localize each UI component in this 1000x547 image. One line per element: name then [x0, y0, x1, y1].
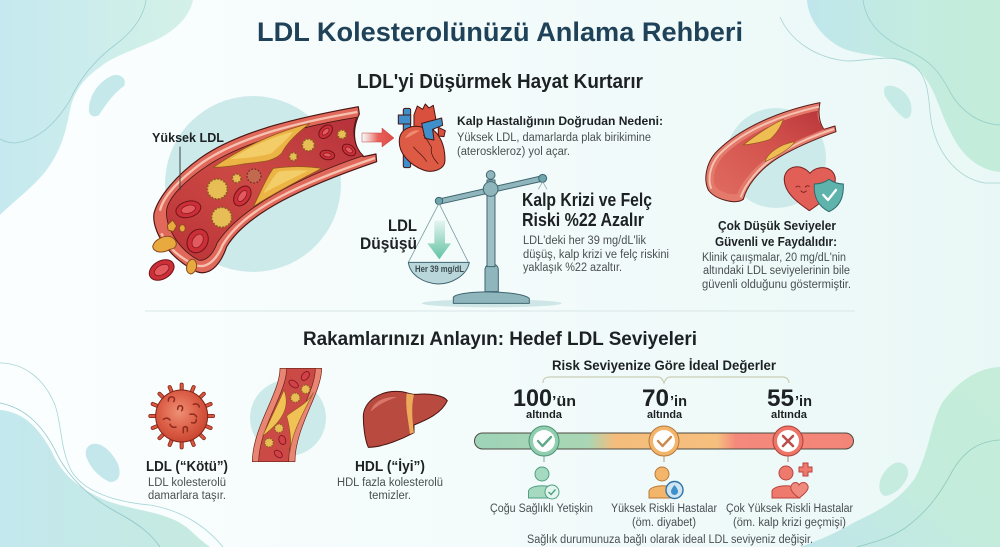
icon: very high-risk patient: [772, 463, 812, 498]
text block: LDL bad: damarlara taşır.: [148, 490, 226, 502]
target: under 55: altında: [771, 409, 808, 421]
text block: very low levels are safe: [702, 218, 851, 291]
target: under 70: altında: [647, 409, 683, 421]
label: pan value: Her 39 mg/dL: [415, 264, 464, 275]
text block: very low levels are safe: Güvenli ve Faydalıdır:: [715, 234, 837, 249]
arrow: artery to heart: [362, 128, 394, 147]
target: under 55: 55: [767, 385, 794, 412]
target: under 70: [642, 385, 687, 421]
target: under 70: 70: [642, 385, 669, 412]
label: LDL Düşüşü: [360, 216, 417, 253]
target: under 100: 100: [513, 385, 552, 412]
text block: risk reduction: düşüş, kalp krizi ve felç riskini: [523, 249, 669, 261]
decorative corner: top right: [780, 0, 1000, 183]
text block: LDL bad: LDL kolesterolü: [148, 477, 226, 489]
label: Yüksek LDL: Yüksek LDL: [152, 131, 224, 145]
label: most healthy adults: Çoğu Sağlıklı Yetişkin: [490, 503, 593, 515]
text block: direct cause of heart disease: Kalp Hastalığının Doğrudan Nedeni:: [457, 114, 663, 128]
text block: HDL good: HDL fazla kolesterolü: [337, 477, 443, 489]
text block: risk reduction: Kalp Krizi ve Felç: [522, 190, 652, 210]
illustration: clean artery with heart and shield: [706, 103, 843, 212]
title: LDL Kolesterolünüzü Anlama Rehberi: [257, 17, 743, 47]
decorative corner: bottom right: [800, 367, 1000, 547]
illustration: artery section: [250, 368, 326, 462]
label: very high-risk patients: (öm. kalp krizi geçmişi): [733, 517, 846, 529]
label: high-risk patients: Yüksek Riskli Hastalar: [611, 503, 717, 515]
label: high-risk patients: (öm. diyabet): [632, 517, 696, 529]
bracket: [543, 377, 789, 383]
text block: risk reduction: [522, 190, 669, 274]
label: very high-risk patients: Çok Yüksek Riskli Hastalar: [726, 503, 853, 515]
text block: LDL bad: LDL (“Kötü”): [146, 458, 228, 475]
text block: risk reduction: Riski %22 Azalır: [522, 210, 644, 230]
text block: very low levels are safe: Klinik çaıışmalar, 20 mg/dL'nin: [702, 252, 846, 264]
target: under 55: ’in: [795, 393, 812, 410]
target: under 100: altında: [526, 409, 563, 421]
label: LDL Düşüşü: LDL: [388, 216, 417, 235]
label: LDL Düşüşü: Düşüşü: [360, 234, 417, 253]
label: ideal values by risk: Risk Seviyenize Göre İdeal Değerler: [552, 358, 777, 373]
illustration: clogged artery: [146, 96, 377, 284]
text block: very low levels are safe: Çok Düşük Seviyeler: [718, 218, 836, 233]
risk scale bar: [474, 426, 854, 462]
target: under 70: ’in: [670, 393, 687, 410]
text block: very low levels are safe: altındaki LDL seviyelerinin bile: [703, 265, 850, 277]
text block: HDL good: HDL (“İyi”): [355, 458, 425, 475]
text block: direct cause of heart disease: (ateroskleroz) yol açar.: [457, 146, 570, 158]
text block: HDL good: [337, 458, 443, 502]
icon: high-risk patient: [649, 467, 683, 498]
icon: heart: [398, 104, 445, 171]
target: under 100: ’ün: [552, 393, 576, 410]
text block: HDL good: temizler.: [369, 490, 411, 502]
heading: target levels: Rakamlarınızı Anlayın: Hedef LDL Seviyeleri: [303, 329, 697, 350]
label: high-risk patients: [611, 503, 717, 529]
decorative corner: bottom left: [0, 363, 223, 547]
text block: direct cause of heart disease: Yüksek LDL, damarlarda plak birikimine: [457, 132, 651, 144]
icon: LDL particle: [150, 385, 213, 447]
target: under 55: [767, 385, 812, 421]
decorative corner: top left: [0, 0, 193, 215]
footer note: Sağlık durumunuza bağlı olarak ideal LDL seviyeniz değişir.: [527, 534, 813, 546]
heading: top section: LDL'yi Düşürmek Hayat Kurtarır: [357, 71, 643, 93]
text block: risk reduction: LDL'deki her 39 mg/dL'lik: [523, 235, 646, 247]
icon: balance scale: [408, 171, 562, 307]
text block: direct cause of heart disease: [457, 114, 663, 158]
text block: very low levels are safe: güvenli olduğunu göstermiştir.: [702, 279, 851, 291]
text block: risk reduction: yaklaşık %22 azaltır.: [523, 262, 622, 274]
label: very high-risk patients: [726, 503, 853, 529]
icon: liver: [363, 391, 447, 447]
text block: LDL bad: [146, 458, 228, 502]
target: under 100: [513, 385, 576, 421]
icon: healthy adult: [528, 467, 559, 499]
